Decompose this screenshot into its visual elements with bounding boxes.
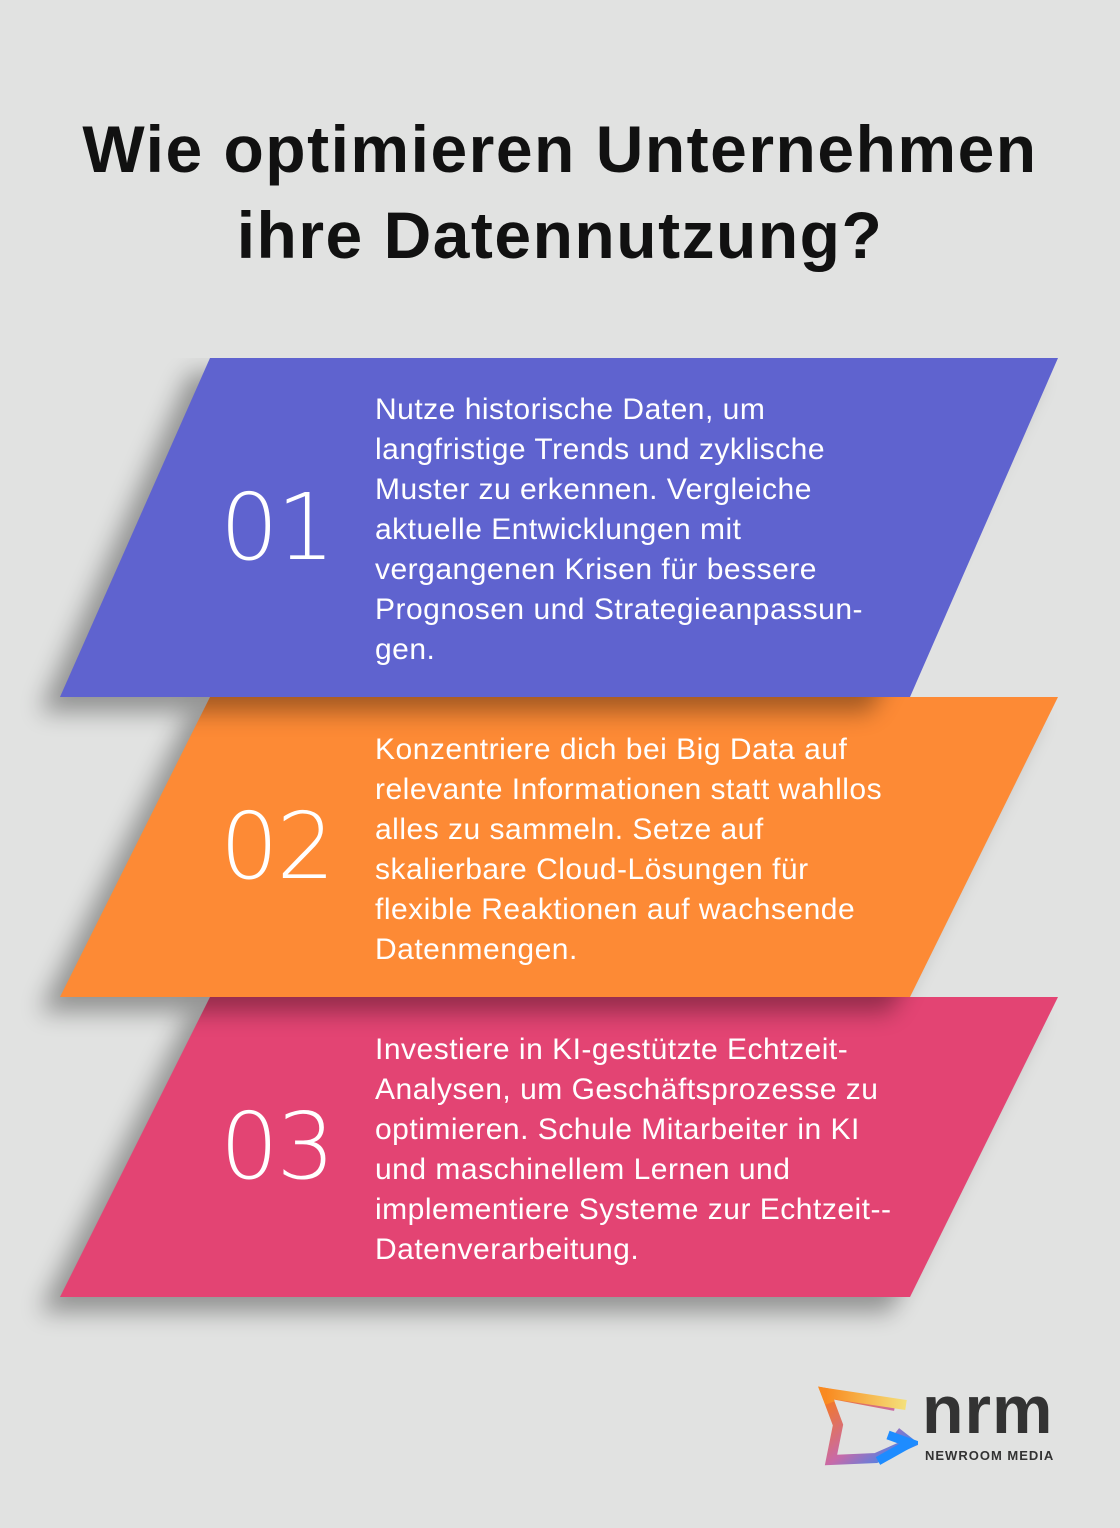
icon: logo mark	[818, 1386, 918, 1466]
text 3: Investiere in KI-gestützte Echtzeit-	[375, 1033, 848, 1066]
title: Wie optimieren Unternehmen	[82, 112, 1038, 186]
logo: NEWROOM MEDIA	[925, 1448, 1054, 1463]
text 1: Muster zu erkennen. Vergleiche	[375, 473, 812, 506]
text 2: Konzentriere dich bei Big Data auf	[375, 733, 847, 766]
text 2	[375, 733, 882, 966]
title: ihre Datennutzung?	[237, 198, 883, 272]
text 1	[375, 393, 863, 666]
title	[82, 112, 1038, 272]
text 1: Prognosen und Strategieanpassun-	[375, 593, 863, 626]
text 3: implementiere Systeme zur Echtzeit--	[375, 1193, 892, 1226]
logo text: nrm	[922, 1372, 1053, 1448]
text 2: skalierbare Cloud-Lösungen für	[375, 853, 809, 886]
text 2: flexible Reaktionen auf wachsende	[375, 893, 855, 926]
text 2: Datenmengen.	[375, 933, 578, 966]
number 03: 03	[220, 1093, 333, 1200]
text 1: langfristige Trends und zyklische	[375, 433, 825, 466]
text 3: optimieren. Schule Mitarbeiter in KI	[375, 1113, 860, 1146]
logo	[818, 1372, 1054, 1466]
text 1: aktuelle Entwicklungen mit	[375, 513, 742, 546]
text 1: vergangenen Krisen für bessere	[375, 553, 817, 586]
text 3	[375, 1033, 892, 1266]
text 2: relevante Informationen statt wahllos	[375, 773, 882, 806]
panel: step 3	[34, 997, 1058, 1326]
text 1: gen.	[375, 633, 435, 666]
text 3: Datenverarbeitung.	[375, 1233, 639, 1266]
panel: step 1	[33, 358, 1058, 727]
number 01: 01	[220, 474, 333, 581]
text 3: und maschinellem Lernen und	[375, 1153, 790, 1186]
text 1: Nutze historische Daten, um	[375, 393, 765, 426]
number 02: 02	[220, 793, 333, 900]
panel: step 2	[34, 697, 1058, 1026]
text 2: alles zu sammeln. Setze auf	[375, 813, 764, 846]
text 3: Analysen, um Geschäftsprozesse zu	[375, 1073, 878, 1106]
